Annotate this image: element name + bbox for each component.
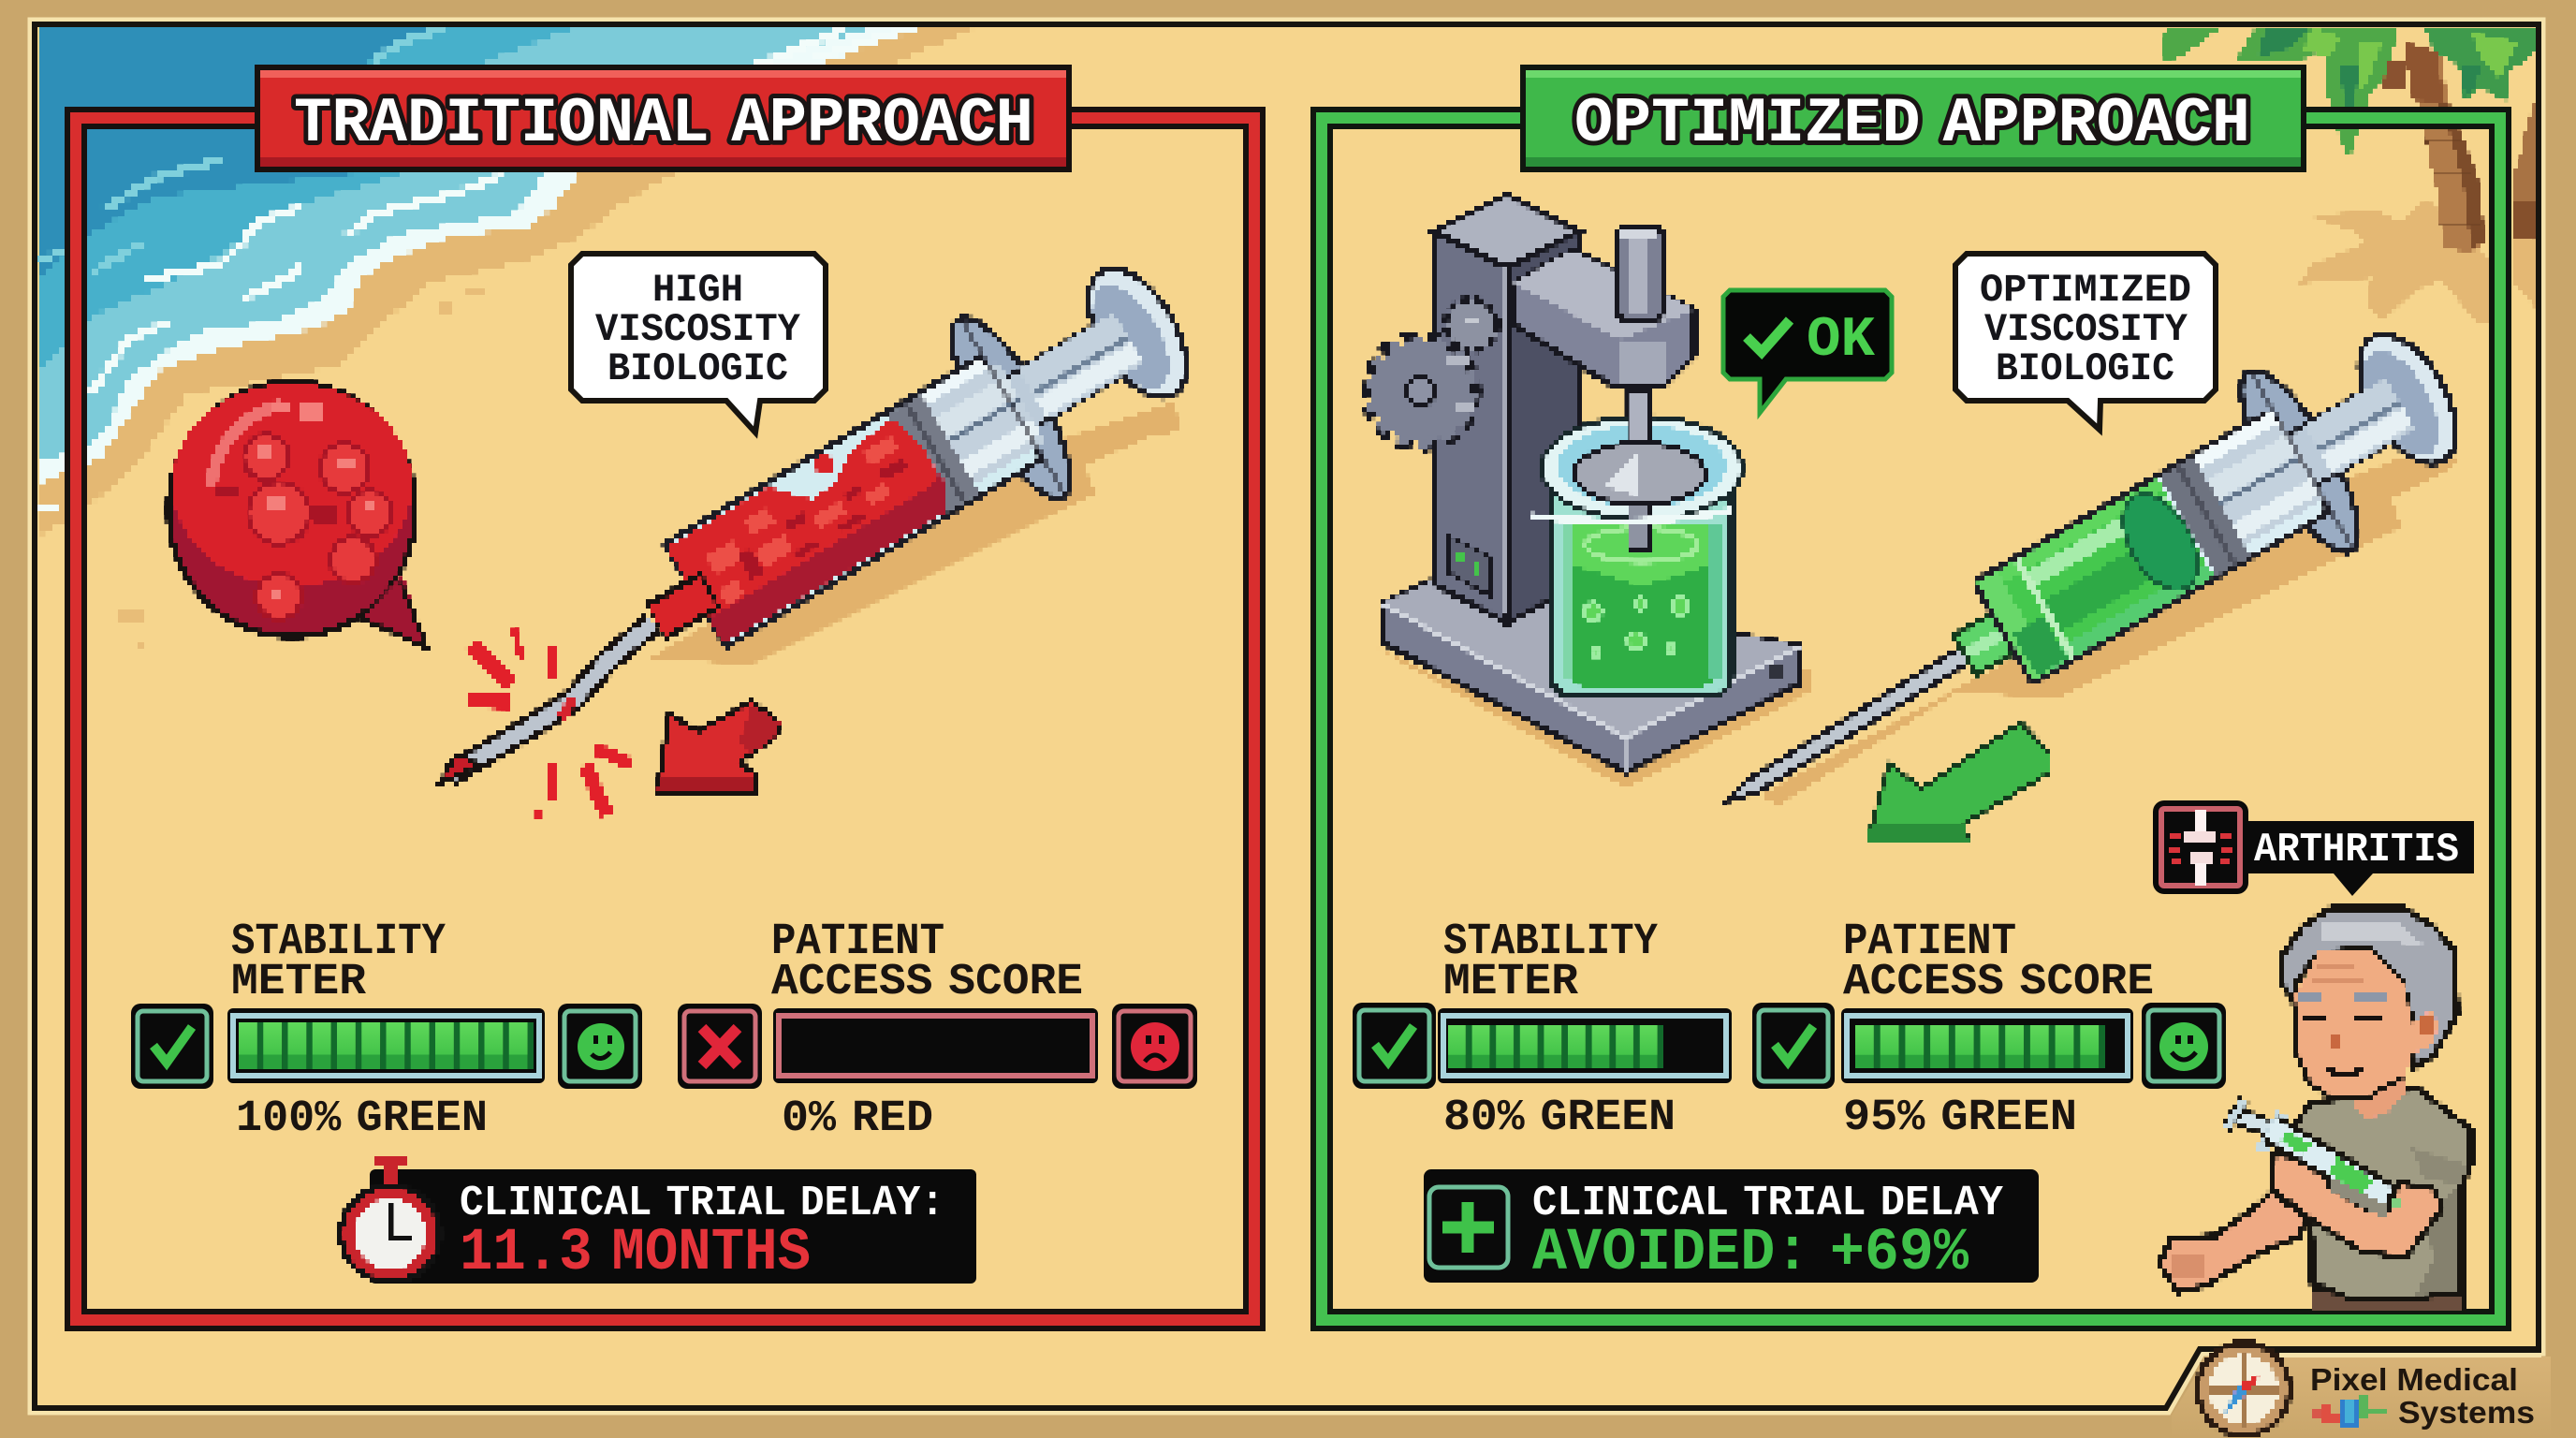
panel border: green	[1322, 118, 2500, 1320]
face	[2293, 948, 2437, 1097]
label: arthritis tag	[2153, 800, 2474, 896]
icon: compass	[2198, 1340, 2542, 1437]
arm	[1514, 250, 1694, 386]
eyes	[2303, 1017, 2326, 1022]
callout: optimized viscosity biologic: BIOLOGIC	[1996, 346, 2174, 391]
meter: stability 80%: STABILITY	[1443, 917, 1659, 967]
badge: OK	[1723, 290, 1892, 413]
far arm and hand	[2159, 1192, 2305, 1292]
icon: check	[1752, 1003, 1835, 1089]
nose	[2329, 1034, 2342, 1050]
far trunk	[2513, 103, 2536, 240]
illustration: smooth green syringe	[1672, 291, 2492, 884]
palm tree and shadow	[2162, 27, 2539, 325]
meter: stability 80%	[1353, 917, 1732, 1143]
meter: patient access score: 0% RED	[782, 1094, 933, 1144]
callout: clinical trial delay avoided +69%: AVOIDED: +69%	[1532, 1220, 1969, 1287]
callout: high viscosity biologic: BIOLOGIC	[607, 346, 788, 391]
gears	[1369, 340, 1472, 443]
trunk	[2420, 56, 2485, 253]
illustration: clogged syringe	[439, 226, 1222, 785]
meter: stability: STABILITY	[231, 917, 446, 967]
icon: happy face	[558, 1004, 642, 1089]
logo: Pixel Medical Systems: Systems	[2398, 1395, 2535, 1430]
icon: pulse bars	[2312, 1396, 2387, 1430]
mouth	[2329, 1067, 2361, 1073]
meter: patient access score	[678, 917, 1197, 1144]
meter: stability 80%: 80% GREEN	[1443, 1093, 1676, 1143]
meter: stability: 100% GREEN	[236, 1094, 488, 1144]
meter: stability	[131, 917, 642, 1144]
panel: traditional approach	[76, 65, 1254, 1320]
meter: patient access score 95%	[1752, 917, 2226, 1143]
icon: cross	[678, 1004, 762, 1089]
bar: 0% red	[773, 1008, 1098, 1083]
pants	[2312, 1290, 2464, 1311]
heading: optimized approach banner	[1520, 65, 2306, 172]
icon: check	[131, 1004, 213, 1089]
meter: stability 80%: METER	[1443, 958, 1579, 1007]
bar: 80% green	[1438, 1008, 1732, 1083]
panel: optimized approach	[1322, 65, 2500, 1320]
meter: patient access score 95%: PATIENT	[1843, 917, 2016, 967]
heading: traditional approach banner	[255, 65, 1072, 172]
logo: Pixel Medical Systems: Pixel Medical	[2310, 1362, 2518, 1397]
leaves	[2162, 27, 2221, 63]
icon: plus	[1429, 1187, 1508, 1268]
background: ocean shore	[37, 27, 977, 651]
panel border: red	[76, 118, 1254, 1320]
near arm	[2272, 1154, 2443, 1257]
meter: patient access score 95%: ACCESS SCORE	[1843, 958, 2154, 1007]
meter: patient access score 95%: 95% GREEN	[1843, 1093, 2077, 1143]
bar: 100% green	[227, 1008, 545, 1083]
eyebrows	[2296, 993, 2321, 1003]
illustration: viscous blob speech bubble	[168, 382, 427, 648]
heading: traditional approach banner: TRADITIONAL APPROACH	[294, 88, 1033, 160]
heading: optimized approach banner: OPTIMIZED APPROACH	[1574, 88, 2250, 160]
icon: impact burst	[468, 629, 632, 818]
illustration: elderly patient injecting	[2159, 908, 2471, 1311]
badge: OK: OK	[1807, 309, 1875, 373]
arrow: green pointing down-left	[1867, 723, 2050, 842]
arrow: red pointing down-left	[657, 701, 780, 793]
callout: clinical trial delay avoided +69%: CLINICAL TRIAL DELAY	[1532, 1180, 2003, 1227]
callout: clinical trial delay 11.3 months	[338, 1157, 976, 1287]
meter: stability: METER	[231, 958, 367, 1007]
callout: high viscosity biologic	[571, 254, 826, 433]
column	[1434, 231, 1507, 623]
shirt	[2296, 1089, 2471, 1299]
callout: high viscosity biologic: HIGH	[652, 268, 743, 313]
control panel	[1449, 536, 1491, 596]
illustration: mixing machine	[1369, 195, 1811, 788]
icon: check	[1353, 1003, 1436, 1089]
label: arthritis tag: ARTHRITIS	[2254, 827, 2459, 873]
callout: optimized viscosity biologic: VISCOSITY	[1984, 307, 2188, 352]
meter: patient access score: PATIENT	[771, 917, 944, 967]
callout: high viscosity biologic: VISCOSITY	[595, 307, 801, 352]
icon: joint	[2153, 800, 2248, 894]
callout: optimized viscosity biologic	[1955, 254, 2216, 430]
small syringe	[2232, 1114, 2276, 1131]
icon: happy face	[2142, 1003, 2226, 1089]
beaker	[1551, 468, 1732, 696]
icon: sad face	[1112, 1004, 1197, 1089]
hair	[2281, 908, 2457, 1067]
callout: clinical trial delay 11.3 months: 11.3 MONTHS	[460, 1220, 811, 1287]
neck	[2349, 1077, 2406, 1119]
bar: 95% green	[1841, 1008, 2133, 1083]
callout: clinical trial delay 11.3 months: CLINICAL TRIAL DELAY:	[460, 1180, 944, 1227]
base	[1383, 580, 1800, 772]
wrinkles	[2319, 964, 2356, 970]
meter: patient access score: ACCESS SCORE	[771, 958, 1083, 1007]
logo: Pixel Medical Systems	[2310, 1362, 2535, 1430]
icon: stopwatch	[338, 1157, 443, 1284]
callout: clinical trial delay avoided +69%	[1424, 1169, 2039, 1287]
callout: optimized viscosity biologic: OPTIMIZED	[1980, 268, 2191, 313]
